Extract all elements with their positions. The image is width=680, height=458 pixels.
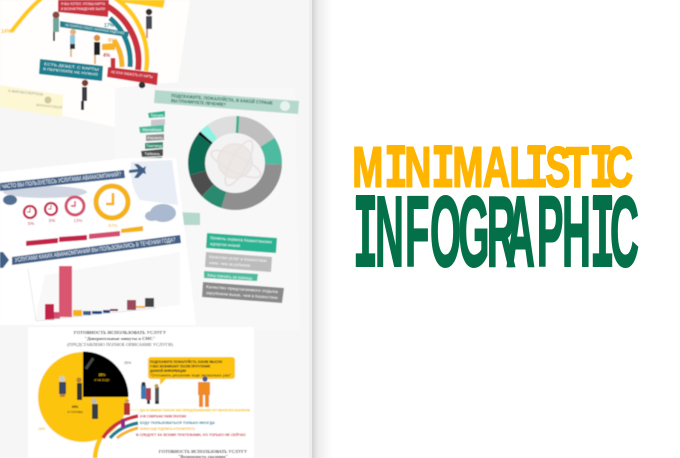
country tags <box>139 111 165 162</box>
title: infographic: I <box>590 179 615 298</box>
icon: globe in doughnut centre <box>208 137 264 189</box>
pie chart: 49% <box>72 405 78 409</box>
clouds decoration <box>3 160 178 222</box>
rainbow stripes and answer lines: НУЖНО ЕЩЁ ПОДУМАТЬ И ПОСМОТРЕТЬ <box>140 427 196 431</box>
pie chart: 35% <box>98 373 106 377</box>
percentage labels: 17% <box>104 23 115 29</box>
callout labels: В ПЕРЕПЛАТЕ НЕ НУЖНО <box>43 67 98 77</box>
bottom card heading: "Доверительные минуты в СМС" <box>84 336 156 341</box>
answer bars: Хочу поехать за границу <box>207 273 253 281</box>
pie chart: И НЕ БУДУ <box>94 378 110 382</box>
title: minimalistic <box>352 136 633 205</box>
bar chart <box>28 252 180 321</box>
panel: clock and bar chart card <box>0 158 196 325</box>
percentage labels <box>1 23 116 59</box>
title: infographic: C <box>610 177 639 288</box>
title: infographic: H <box>562 177 591 288</box>
pie chart: 35% <box>124 361 132 365</box>
title: minimalistic: I <box>384 138 408 205</box>
teal note: ТГ <box>178 214 183 219</box>
people group <box>141 376 210 407</box>
title: infographic: A <box>506 177 535 288</box>
icon: plane on cloud <box>129 164 146 178</box>
speech bubble <box>148 357 235 385</box>
rainbow stripes and answer lines: БУДУ ПОЛЬЗОВАТЬСЯ ТОЛЬКО ИНОГДА <box>140 421 216 425</box>
doughnut heading banner: ПОДСКАЖИТЕ, ПОЖАЛУЙСТА, В КАКОЙ СТРАНЕ <box>171 91 273 106</box>
country tags: Тайвань <box>144 151 160 156</box>
clock row <box>24 186 128 228</box>
speech bubble: ПОДСКАЖИТЕ ПОЖАЛУЙСТА, КАКИЕ МЫСЛИ <box>150 360 223 364</box>
title: minimalistic: C <box>606 136 633 200</box>
pie people icons <box>59 357 98 419</box>
clock row: 5% <box>49 218 55 223</box>
bottom card heading <box>67 330 173 347</box>
speech bubble: ДАННОЙ ИНФОРМАЦИИ <box>150 369 186 373</box>
answer bars: Качество услуг в Казахстане <box>209 254 268 263</box>
title: infographic: N <box>375 177 404 288</box>
callout labels: Я БЫ ХОТЕЛ, ЧТОБЫ КАРТА <box>61 2 106 6</box>
cartoon people <box>52 9 152 110</box>
callout labels: И ВОЗНАГРАЖДЕНИЕ БЫЛИ <box>61 7 105 11</box>
callout labels <box>39 0 165 85</box>
answer bars: ниже, чем за рубежом <box>209 260 251 268</box>
title: infographic <box>353 177 639 298</box>
banner: airlines used in the last year: УСЛУГАМИ КАКИХ АВИАКОМПАНИЙ ВЫ ПОЛЬЗОВАЛИСЬ В ТЕЧЕНИИ ГОДА? <box>14 235 176 264</box>
clock legend tags <box>26 226 143 246</box>
speech bubble: У ВАС ВОЗНИКАЮТ ПОСЛЕ ПРОЧТЕНИЯ <box>150 364 210 368</box>
title: minimalistic: A <box>483 136 510 200</box>
percentage labels: 4% <box>103 53 111 59</box>
doughnut heading banner: ВЫ ПЛАНИРУЕТЕ ЛЕЧЕНИЕ? <box>171 98 226 107</box>
title: infographic: R <box>487 177 516 288</box>
clock row: 5% <box>28 221 34 226</box>
title: minimalistic: M <box>352 136 383 200</box>
panel: doughnut survey card <box>115 88 300 330</box>
rainbow stripes and answer lines: 16% <box>38 427 45 431</box>
percentage labels: 9% <box>108 38 116 44</box>
rainbow arcs <box>11 0 147 71</box>
country tags: Таиланд <box>146 143 163 148</box>
title: minimalistic: T <box>566 136 589 200</box>
cream footer band: © ФИНЭКСПЕРТИЗА <box>8 89 44 97</box>
title: minimalistic: I <box>431 138 455 205</box>
answer bars: Качество предлагаемого отдыха <box>206 284 279 294</box>
title: infographic: G <box>458 177 490 288</box>
title: infographic: P <box>537 177 563 288</box>
title: minimalistic: M <box>453 136 483 200</box>
second chart heading: ГОТОВНОСТЬ ИСПОЛЬЗОВАТЬ УСЛУГУ <box>159 449 248 454</box>
country tags: Израиль <box>147 135 163 140</box>
title: minimalistic: I <box>589 138 613 205</box>
cream footer band: ФИНАНСОВЫЙ <box>36 103 63 110</box>
teal note <box>176 212 200 225</box>
answer bars: зарубежом выше, чем в Казахстане <box>206 290 279 300</box>
title: minimalistic: S <box>546 136 570 200</box>
title: infographic: F <box>405 177 429 288</box>
speech bubble: "Отложить решение еще несколько раз" <box>150 374 232 378</box>
banner: how often do you use airlines <box>0 170 125 191</box>
rainbow stripes and answer lines: И НЕ СОВЕРШАЮ ТАКИЕ ПЛАТЕЖИ <box>140 414 186 418</box>
title: minimalistic: L <box>510 136 532 200</box>
icon: plane at banner start <box>0 252 9 268</box>
panel: top-left rainbow card <box>0 0 190 127</box>
bottom card heading: ГОТОВНОСТЬ ИСПОЛЬЗОВАТЬ УСЛУГУ <box>74 330 167 335</box>
panel: bottom readiness card <box>28 327 254 458</box>
rainbow stripes and answer lines <box>38 399 251 458</box>
country tags: Турция <box>150 112 164 118</box>
answer bars: курортов низкий <box>210 241 240 248</box>
paper sheet with shadow <box>0 0 332 458</box>
rainbow stripes and answer lines: В СЛЕДУЕТ ЗА ВСЕМИ ПЛАТЕЖАМИ, НО ТОЛЬКО НЕ СЕЙЧАС <box>136 433 247 437</box>
callout labels: НЕ ХОЧУ ЗАВИСЕТЬ ОТ КАРТЫ <box>111 70 153 79</box>
cream footer band <box>0 85 63 117</box>
pie chart <box>38 352 132 442</box>
title: infographic: O <box>430 177 461 288</box>
banner: how often do you use airlines: ЧАСТО ВЫ ПОЛЬЗУЕТЕСЬ УСЛУГАМИ АВИАКОМПАНИЙ? <box>1 170 122 190</box>
rainbow stripes and answer lines: ДА И ИМЕЮ ТАКОЕ ЖЕ ПРЕДЛОЖЕНИЕ ОТ МНОГИХ БАНКОВ <box>140 408 251 412</box>
title: minimalistic: I <box>525 138 548 205</box>
second chart heading <box>159 449 248 458</box>
doughnut chart <box>196 124 274 202</box>
title: minimalistic: N <box>404 136 431 200</box>
banner: airlines used in the last year <box>12 235 181 265</box>
bottom card heading: (ПРЕДСТАВЛЕНО ПОЛНОЕ ОПИСАНИЕ УСЛУГИ) <box>67 342 173 347</box>
country tags: Малайзия <box>143 127 161 132</box>
callout labels: НЕ ПОНЯТНО СМЫСЛ, НАЛИЧНЫЕ НАДЁЖНЕЕ <box>65 23 125 35</box>
answer bars <box>202 233 284 303</box>
title: infographic: I <box>353 179 378 298</box>
percentage labels: 14% <box>1 29 12 35</box>
clock row: 13% <box>73 218 83 223</box>
callout labels: ЕСТЬ ДЕБЕТ. С КАРТЫ <box>44 62 99 72</box>
clock row: 67% <box>108 223 118 228</box>
pie chart: И ГОТОВЫ <box>67 410 83 414</box>
doughnut green sliver <box>237 116 238 133</box>
doughnut heading banner <box>154 90 299 114</box>
answer bars: Уровень сервиса Казахстанских <box>210 235 272 244</box>
